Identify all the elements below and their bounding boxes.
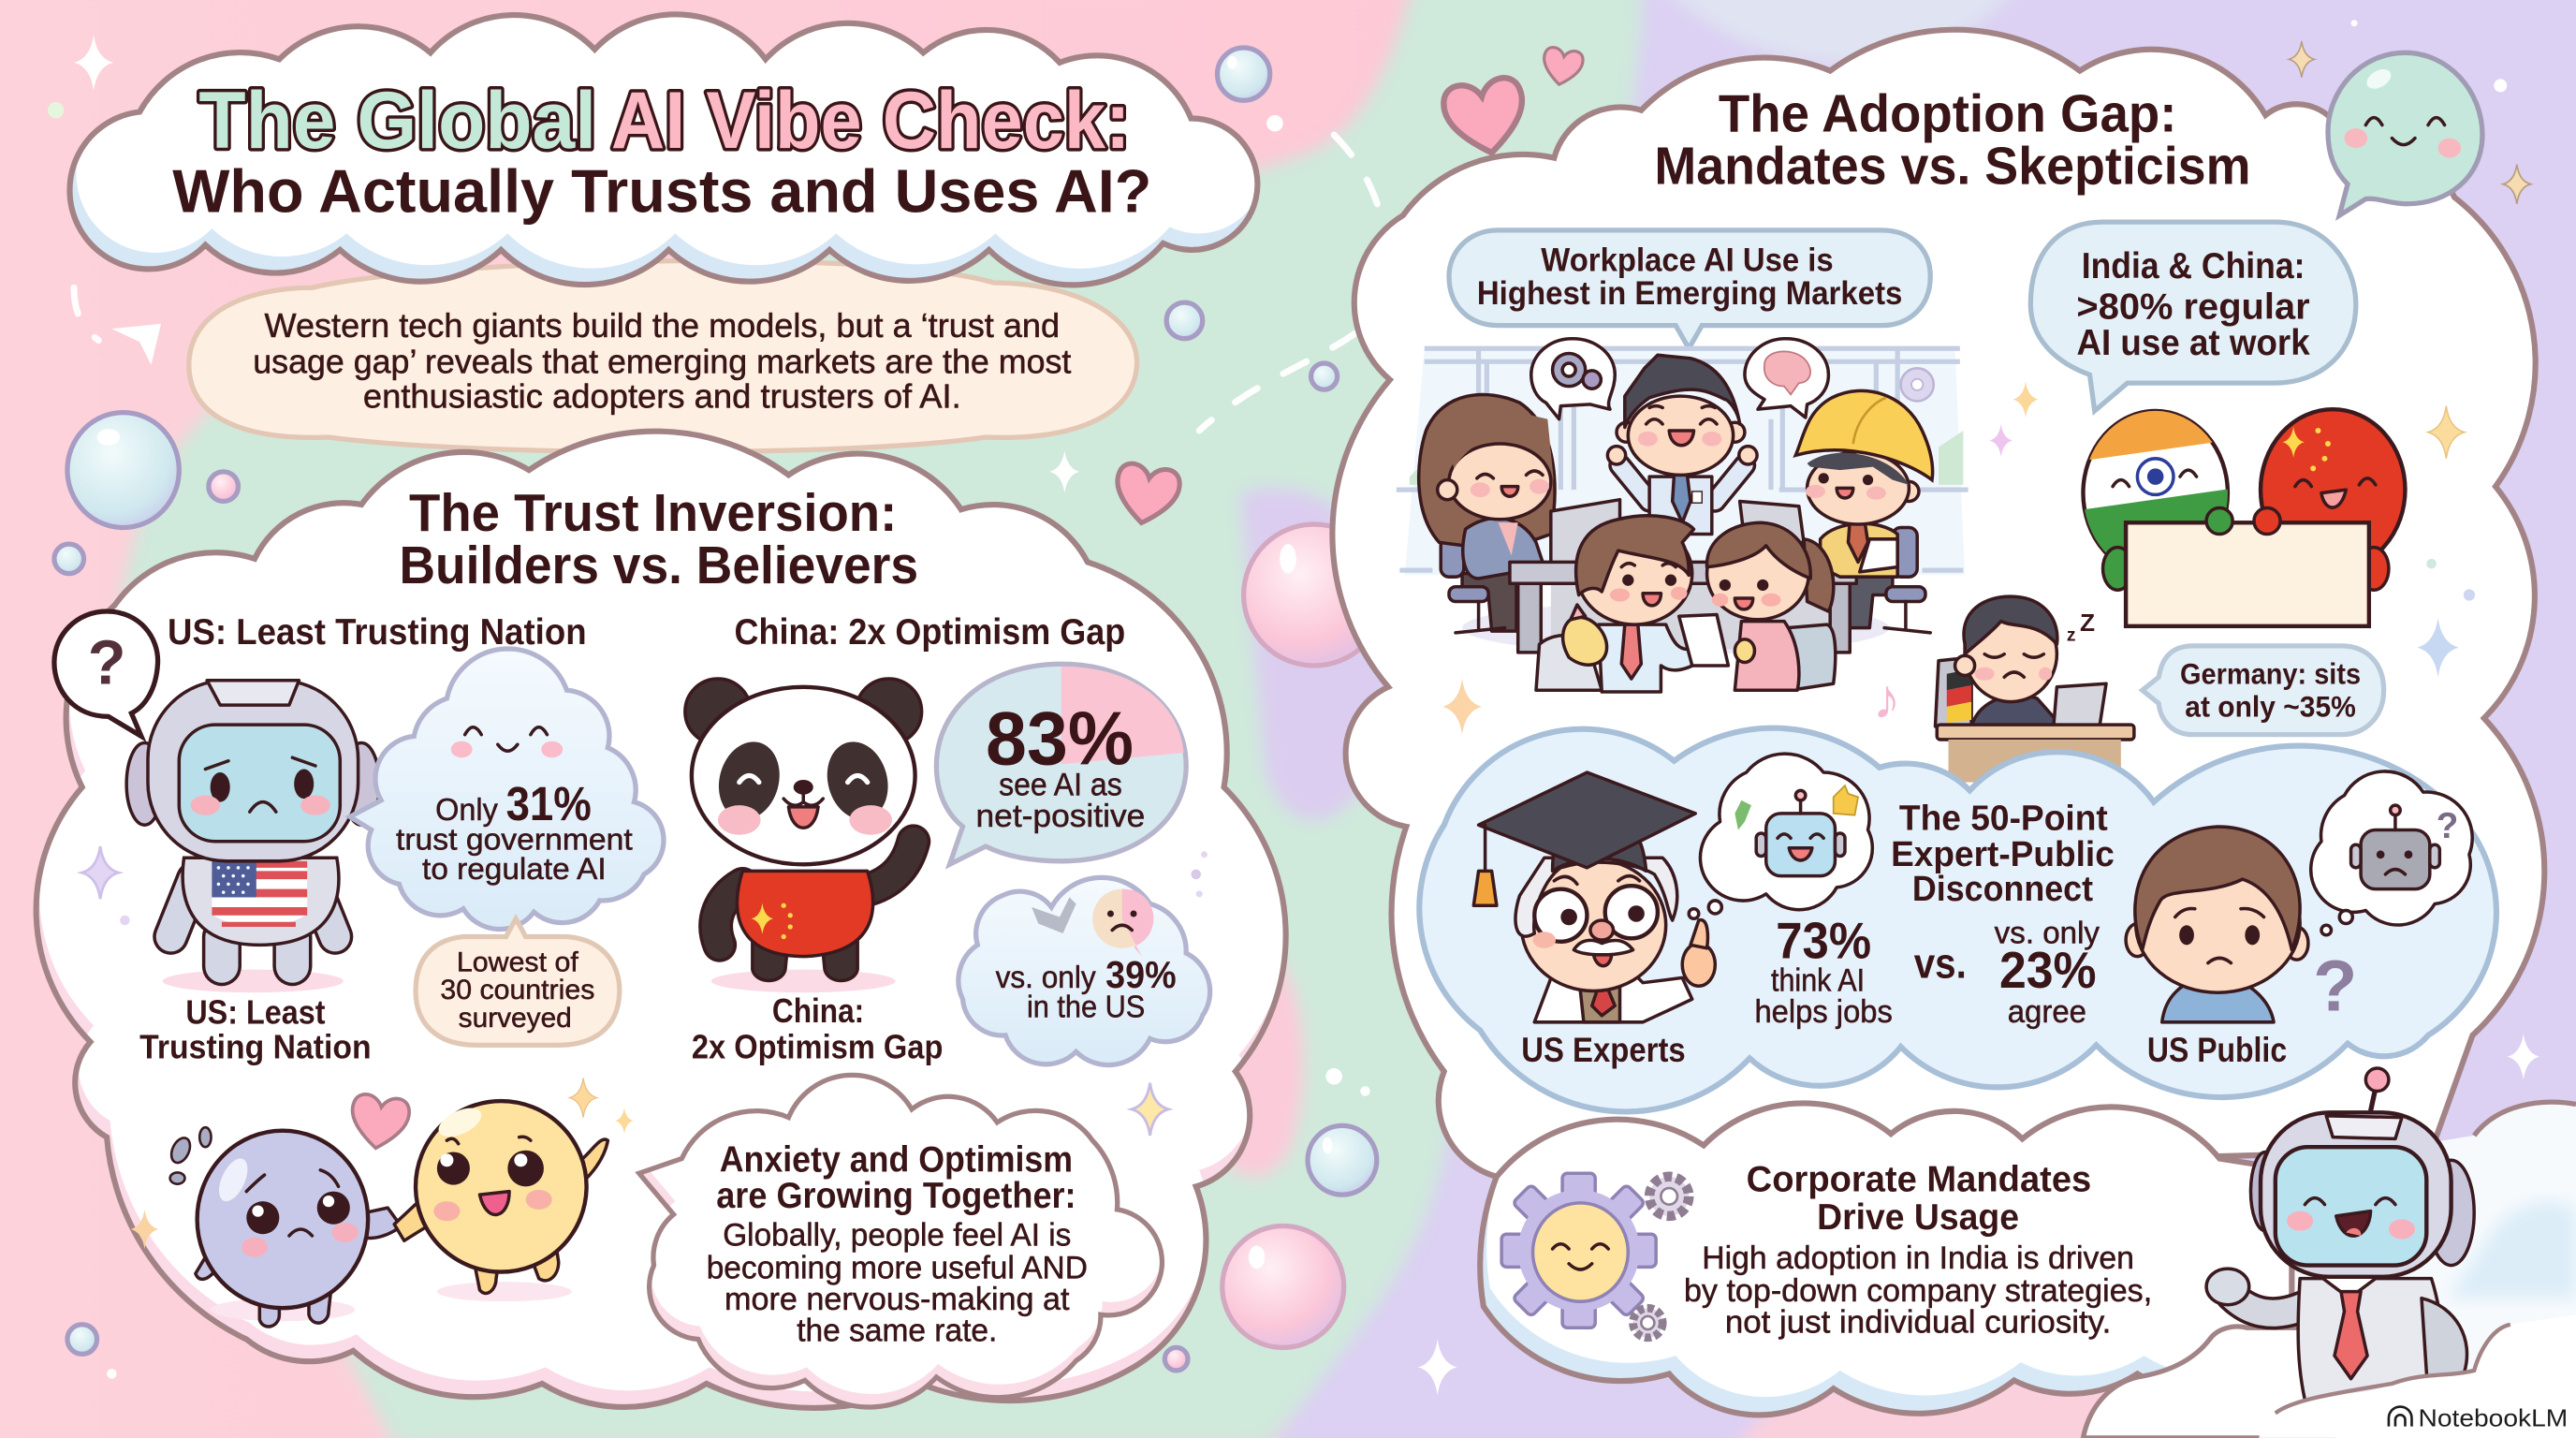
icon: smiling speech bubble xyxy=(2328,52,2482,215)
character: sleeping German worker: z xyxy=(2067,626,2076,646)
decoration: sparkles and note right panel: ♪ xyxy=(1873,668,1901,730)
callout: 31% cloud xyxy=(350,649,664,930)
heading: 50-point disconnect: Expert-Public xyxy=(1891,834,2115,873)
heading: adoption gap xyxy=(1654,84,2250,196)
callout: India and China stat: AI use at work xyxy=(2076,323,2310,363)
person: woman with ponytail xyxy=(1706,522,1836,690)
label: China optimism gap: 2x Optimism Gap xyxy=(692,1027,943,1065)
decoration: pastel sparkles left panel xyxy=(81,846,1168,1249)
subheading: China: China: 2x Optimism Gap xyxy=(735,612,1125,653)
stat text: 39%: 39% xyxy=(1105,953,1177,996)
blank sign board xyxy=(2126,522,2369,626)
stat text: 31%: Only xyxy=(435,793,498,828)
heading: 50-point disconnect xyxy=(1891,798,2115,908)
stat: 23% public: vs. only xyxy=(1995,917,2100,951)
stat text: 39%: in the US xyxy=(1027,990,1145,1025)
stat text: 83%: net-positive xyxy=(976,799,1145,834)
heading: adoption gap: The Adoption Gap: xyxy=(1719,84,2177,143)
laptops and desk xyxy=(1510,500,1856,653)
panel: the adoption gap xyxy=(1332,30,2576,1438)
stat text: 31%: 31% xyxy=(506,777,592,830)
character: mascot robot xyxy=(2206,1068,2474,1414)
panel: 50-point disconnect xyxy=(1419,728,2496,1111)
characters: anxiety and optimism holding hands xyxy=(168,1093,607,1327)
callout: anxiety and optimism text xyxy=(639,1062,1164,1407)
character: US expert professor xyxy=(1473,772,1715,1022)
stat: 23% public: agree xyxy=(2008,994,2086,1030)
stat text: 31%: trust government xyxy=(396,823,633,857)
blue blob xyxy=(168,1127,401,1327)
stat text: 39%: vs. only xyxy=(996,961,1096,995)
heading: trust inversion: The Trust Inversion: xyxy=(409,483,897,542)
anxiety body: the same rate. xyxy=(797,1313,997,1348)
stat text: 83% xyxy=(976,697,1145,834)
label: US experts: US Experts xyxy=(1521,1031,1686,1069)
heading: trust inversion xyxy=(399,483,918,594)
decoration: hearts xyxy=(1111,46,1585,528)
subheading: US: US: Least Trusting Nation xyxy=(168,612,587,653)
panel: the trust inversion xyxy=(37,415,1289,1408)
stat text: 31% xyxy=(396,777,633,886)
title line 1: The Global xyxy=(198,76,596,166)
stat: 23% public xyxy=(1995,917,2100,1030)
icon: question mark: ? xyxy=(2313,946,2357,1027)
title line 1: AI Vibe Check: xyxy=(611,76,1131,166)
callout: workplace AI use: Workplace AI Use is xyxy=(1541,242,1834,279)
desk xyxy=(1937,725,2134,783)
summary text: usage gap’ reveals that emerging markets are the most xyxy=(253,343,1071,381)
stat: 73% experts: think AI xyxy=(1771,962,1865,998)
stat: 73% experts xyxy=(1754,912,1893,1030)
corporate heading: Corporate Mandates xyxy=(1747,1160,2091,1200)
callout: Germany stat xyxy=(2143,646,2384,735)
callout: workplace AI use xyxy=(1449,230,1930,348)
illustration: India and China holding sign xyxy=(2081,407,2408,629)
icon: question bubble: ? xyxy=(88,628,125,697)
logo: NotebookLM: NotebookLM xyxy=(2419,1406,2568,1432)
callout: Germany stat: Germany: sits xyxy=(2180,656,2361,690)
label: US least trusting nation: US: Least xyxy=(185,993,326,1032)
China character xyxy=(2261,409,2405,590)
person: cheering man xyxy=(1607,355,1757,535)
label: China optimism gap: China: xyxy=(772,991,864,1030)
brain thought bubble xyxy=(1745,339,1828,418)
callout: lowest of 30 countries xyxy=(416,918,620,1045)
icon: sad pie face xyxy=(1092,889,1153,957)
callout: workplace AI use: Highest in Emerging Markets xyxy=(1477,275,1902,312)
panel: corporate mandates xyxy=(1480,1085,2298,1415)
chairs and legs behind desk xyxy=(1441,528,1930,633)
callout: lowest of 30 countries: surveyed xyxy=(459,1003,572,1034)
illustration: office team xyxy=(1397,339,1969,692)
small gear xyxy=(1901,368,1934,401)
summary text: Western tech giants build the models, but a ‘trust and xyxy=(265,306,1060,345)
summary text: enthusiastic adopters and trusters of AI. xyxy=(363,376,961,415)
heading: 50-point disconnect: Disconnect xyxy=(1912,869,2093,908)
label: China optimism gap xyxy=(692,991,943,1065)
stat: 73% experts: 73% xyxy=(1776,912,1871,969)
callout: 83% pie bubble xyxy=(936,664,1186,864)
corporate body: High adoption in India is driven xyxy=(1702,1240,2134,1276)
anxiety body: Globally, people feel AI is xyxy=(723,1218,1071,1254)
gear thought bubble xyxy=(1531,339,1615,419)
anxiety heading: Anxiety and Optimism xyxy=(720,1140,1073,1181)
label: US public: US Public xyxy=(2147,1031,2287,1069)
corporate body xyxy=(1684,1240,2152,1341)
callout: India and China stat: >80% regular xyxy=(2076,287,2310,328)
anxiety body xyxy=(707,1218,1088,1348)
stat: 73% experts: helps jobs xyxy=(1754,994,1893,1030)
icon: white swoosh arrow xyxy=(111,324,161,365)
callout: Germany stat: at only ~35% xyxy=(2185,689,2356,723)
corporate body: by top-down company strategies, xyxy=(1684,1273,2152,1309)
mortarboard hat xyxy=(1473,772,1695,905)
stat text: 83%: 83% xyxy=(986,697,1134,781)
callout: India and China stat: India & China: xyxy=(2082,246,2305,286)
icon: question bubble xyxy=(54,611,158,736)
thought bubble: sad robot: ? xyxy=(2437,806,2458,846)
icon: smiling gear xyxy=(1501,1173,1689,1338)
callout: 39% cloud xyxy=(959,877,1210,1065)
label: vs: vs. xyxy=(1914,939,1967,987)
corporate heading xyxy=(1747,1160,2091,1238)
panel: summary xyxy=(189,260,1137,452)
label: US least trusting nation: Trusting Nation xyxy=(139,1027,372,1065)
character: sleeping German worker xyxy=(1936,596,2134,783)
anxiety body: more nervous-making at xyxy=(724,1282,1070,1317)
heading: 50-point disconnect: The 50-Point xyxy=(1899,798,2108,837)
character: panda xyxy=(685,679,922,992)
stat text: 83%: see AI as xyxy=(999,768,1122,803)
anxiety body: becoming more useful AND xyxy=(707,1251,1088,1286)
character: US robot xyxy=(126,681,379,992)
decoration: lower cloud behind robot xyxy=(2083,1327,2333,1438)
summary text xyxy=(253,306,1071,415)
title line 2: Who Actually Trusts and Uses AI? xyxy=(172,157,1151,226)
decoration: foreground cloud bottom right xyxy=(2259,1314,2576,1438)
stat: 23% public: 23% xyxy=(1999,942,2097,999)
person: man with plush and paper xyxy=(1536,516,1728,692)
decoration: sparkles and note right panel xyxy=(1442,41,2531,735)
corporate body: not just individual curiosity. xyxy=(1725,1305,2111,1341)
heading: adoption gap: Mandates vs. Skepticism xyxy=(1654,137,2250,196)
decoration: bubbles left and centre xyxy=(54,48,1385,1371)
callout: India and China stat xyxy=(2030,222,2356,411)
stat text: 39% xyxy=(996,953,1177,1025)
person: hard hat worker xyxy=(1795,390,1933,577)
thought bubble: sad robot xyxy=(2311,771,2472,935)
title line 1 xyxy=(198,76,1131,166)
office window backdrop xyxy=(1397,348,1969,575)
yellow blob xyxy=(394,1101,607,1293)
thought bubble: happy robot xyxy=(1689,754,1872,918)
stat text: 31%: to regulate AI xyxy=(422,852,607,886)
panel: title cloud xyxy=(69,0,1264,285)
icon: US flag on chest xyxy=(212,861,307,927)
decoration: upper right cloud behind robot xyxy=(2086,1102,2576,1438)
callout: lowest of 30 countries: Lowest of xyxy=(457,946,579,977)
decoration: white dashed trail xyxy=(74,135,1386,431)
icon: thumbs down xyxy=(1032,897,1076,933)
heading: trust inversion: Builders vs. Believers xyxy=(399,536,918,594)
anxiety heading: are Growing Together: xyxy=(716,1176,1076,1216)
callout: lowest of 30 countries: 30 countries xyxy=(440,975,594,1005)
India character xyxy=(2081,408,2230,592)
corporate heading: Drive Usage xyxy=(1817,1197,2019,1238)
label: US least trusting nation xyxy=(139,993,372,1065)
decoration: trail of dots near US robot and china xyxy=(120,851,1208,925)
anxiety heading xyxy=(716,1140,1076,1216)
character: US public boy xyxy=(2126,827,2308,1022)
person: woman in suit xyxy=(1419,394,1555,579)
character: sleeping German worker: Z xyxy=(2080,609,2095,637)
